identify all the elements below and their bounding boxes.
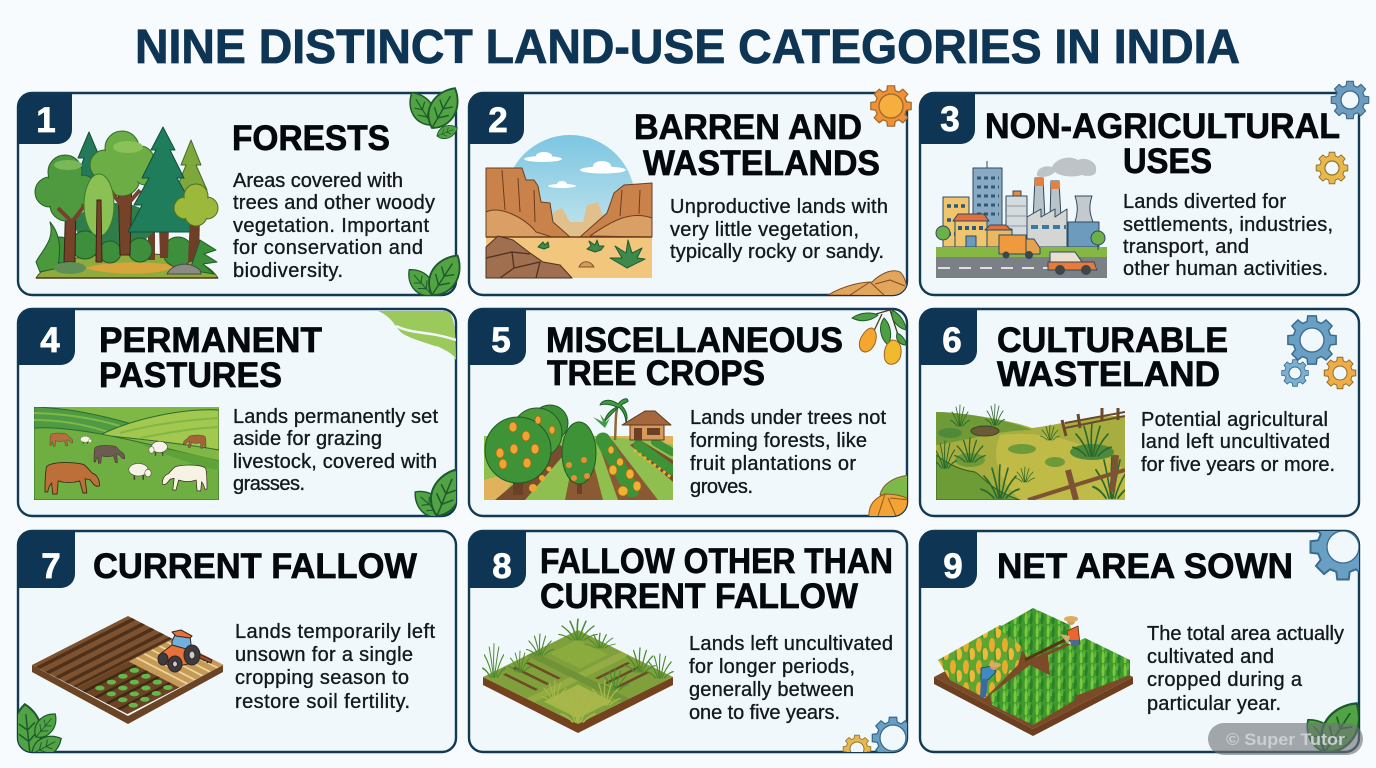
heading: miscellaneous tree crops — [546, 321, 843, 393]
body text: for conservation and — [233, 237, 423, 259]
panel: barren and wastelands — [469, 86, 911, 296]
number badge 4: 4 — [40, 321, 60, 360]
illustration: pasture with livestock — [34, 407, 219, 500]
number badge 1 — [18, 93, 72, 144]
panel: current fallow — [11, 531, 456, 762]
icon: gears cluster — [1282, 316, 1356, 389]
number badge 6 — [920, 309, 977, 365]
body text: cropping season to — [235, 667, 409, 689]
body text — [1123, 191, 1333, 280]
body text: Areas covered with — [233, 170, 403, 192]
number badge 9 — [920, 531, 977, 588]
heading: current fallow: CURRENT FALLOW — [93, 547, 417, 586]
panel: forests — [18, 82, 469, 302]
heading: fallow other than current fallow: FALLOW OTHER THAN — [540, 542, 893, 581]
body text — [1147, 623, 1344, 715]
icon: leaves bottom right — [402, 248, 469, 302]
number badge 7: 7 — [41, 547, 61, 586]
icon: sand rocks corner — [828, 271, 908, 296]
heading: non-agricultural uses: NON-AGRICULTURAL — [985, 107, 1340, 146]
body text: generally between — [689, 679, 854, 701]
icon: corner gear — [1310, 531, 1359, 580]
body text — [235, 621, 435, 713]
body text: grasses. — [233, 473, 305, 495]
number badge 6: 6 — [942, 321, 962, 360]
panel: fallow other than current fallow — [469, 531, 914, 763]
heading: non-agricultural uses — [985, 107, 1340, 181]
illustration: overgrown field — [934, 404, 1131, 500]
body text: groves. — [690, 476, 753, 498]
number badge 7 — [18, 531, 75, 588]
illustration: orchard — [484, 399, 673, 500]
icon: corner gears — [842, 716, 907, 752]
number badge 2: 2 — [488, 101, 508, 140]
icon: leaves top right — [403, 82, 466, 142]
illustration: city and factory — [936, 158, 1107, 278]
number badge 9: 9 — [943, 547, 963, 586]
body text: trees and other woody — [233, 192, 435, 214]
heading: culturable wasteland: WASTELAND — [997, 355, 1220, 394]
body text: other human activities. — [1123, 258, 1328, 280]
heading: forests: FORESTS — [232, 119, 390, 158]
body text: restore soil fertility. — [235, 691, 410, 713]
heading: barren and wastelands: WASTELANDS — [643, 144, 880, 183]
body text — [233, 170, 435, 282]
body text: one to five years. — [689, 702, 840, 724]
body text — [690, 407, 886, 498]
heading: permanent pastures: PASTURES — [99, 356, 282, 395]
illustration: desert canyon — [486, 135, 652, 278]
panel: permanent pastures — [18, 309, 469, 523]
icon: mangoes — [852, 310, 906, 364]
number badge 8: 8 — [492, 547, 512, 586]
number badge 3: 3 — [940, 100, 960, 139]
illustration: ploughed field with tractor — [32, 616, 223, 724]
body text: settlements, industries, — [1123, 214, 1333, 236]
icon: orange gear — [871, 86, 911, 126]
panel: net area sown — [918, 530, 1360, 754]
panel: miscellaneous tree crops — [469, 309, 910, 520]
body text: vegetation. Important — [233, 215, 429, 237]
body text: unsown for a single — [235, 644, 413, 666]
number badge 4 — [18, 309, 75, 365]
heading: permanent pastures: PERMANENT — [99, 321, 322, 360]
body text: Lands left uncultivated — [689, 633, 893, 655]
heading: miscellaneous tree crops: TREE CROPS — [547, 354, 765, 393]
watermark — [1208, 723, 1363, 755]
body text: fruit plantations or — [690, 453, 856, 475]
body text — [233, 406, 438, 495]
illustration: forest — [35, 127, 218, 278]
body text: Lands under trees not — [690, 407, 886, 429]
icon: leaf bottom right — [414, 468, 456, 516]
heading: fallow other than current fallow — [540, 542, 893, 616]
body text — [689, 633, 893, 724]
icon: gold gear — [1316, 152, 1348, 184]
title: NINE DISTINCT LAND-USE CATEGORIES IN INDIA — [135, 21, 1240, 74]
heading: non-agricultural uses: USES — [1123, 142, 1212, 181]
icon: tractor — [158, 630, 212, 672]
icon: leaves bottom right — [1306, 702, 1359, 752]
number badge 3 — [920, 93, 975, 144]
number badge 8 — [469, 531, 526, 588]
body text: Unproductive lands with — [670, 196, 888, 218]
body text: Lands temporarily left — [235, 621, 435, 643]
body text — [670, 196, 888, 263]
heading: permanent pastures — [99, 321, 322, 395]
heading: fallow other than current fallow: CURRENT FALLOW — [540, 577, 858, 616]
panel: culturable wasteland — [920, 309, 1359, 516]
body text: very little vegetation, — [670, 219, 859, 241]
icon: blue gear — [1331, 81, 1369, 119]
heading: culturable wasteland — [997, 321, 1228, 394]
illustration: overgrown iso plot — [483, 619, 673, 733]
panel: non-agricultural uses — [920, 81, 1369, 295]
icon: green wave — [378, 311, 456, 360]
icon: leaves bottom left — [18, 703, 62, 752]
number badge 5: 5 — [491, 321, 511, 360]
heading: culturable wasteland: CULTURABLE — [997, 321, 1228, 360]
number badge 2 — [469, 93, 524, 144]
body text: Lands permanently set — [233, 406, 438, 428]
body text: particular year. — [1147, 693, 1281, 715]
body text: typically rocky or sandy. — [670, 241, 884, 263]
number badge 5 — [469, 309, 526, 365]
body text: The total area actually — [1147, 623, 1344, 645]
watermark: © Super Tutor — [1226, 730, 1345, 749]
body text — [1141, 409, 1335, 476]
body text: for longer periods, — [689, 656, 855, 678]
heading: barren and wastelands — [634, 108, 880, 183]
body text: biodiversity. — [233, 260, 343, 282]
heading: miscellaneous tree crops: MISCELLANEOUS — [546, 321, 843, 360]
body text: transport, and — [1123, 236, 1249, 258]
illustration: sown crop plots with farmers — [934, 608, 1133, 736]
body text: aside for grazing — [233, 428, 382, 450]
body text: Potential agricultural — [1141, 409, 1328, 431]
icon: fruit corner — [868, 474, 907, 516]
body text: land left uncultivated — [1141, 431, 1330, 453]
heading: barren and wastelands: BARREN AND — [634, 108, 862, 147]
body text: for five years or more. — [1141, 454, 1335, 476]
body text: livestock, covered with — [233, 451, 437, 473]
heading: net area sown: NET AREA SOWN — [997, 547, 1293, 586]
body text: Lands diverted for — [1123, 191, 1286, 213]
body text: cropped during a — [1147, 669, 1303, 691]
body text: forming forests, like — [690, 430, 867, 452]
body text: cultivated and — [1147, 646, 1274, 668]
number badge 1: 1 — [36, 101, 56, 140]
